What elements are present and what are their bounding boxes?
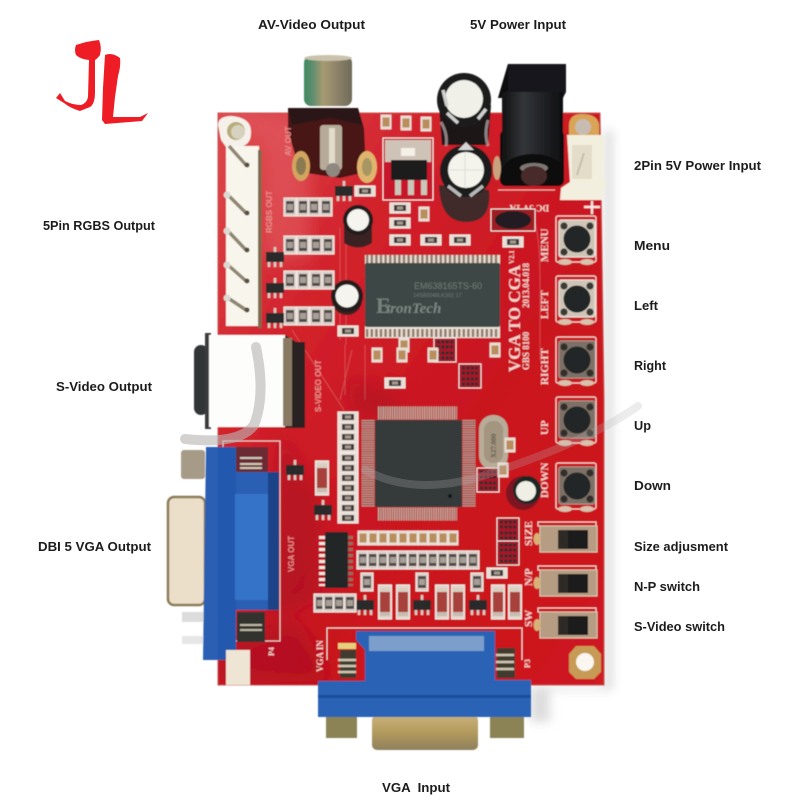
switch: N-P [534,566,597,596]
label: Left: Left [634,299,659,313]
resistor networks right of QFP [477,438,519,565]
resistor rows below QFP [357,531,479,569]
diodes and transistors row [314,568,522,619]
board shadow [530,130,613,722]
silk labels: AV OUT [284,126,293,156]
memory chip: EM638165TS-60 [414,281,482,291]
silk labels: V2.1 [508,250,516,264]
silk: plus sign [584,201,600,214]
label: N-P switch: N-P switch [634,580,700,594]
button: Menu [556,216,596,265]
switch: S-Video [534,608,597,638]
memory chip [365,255,500,338]
copper zone shading [218,380,410,685]
watermark: grey JL strokes [185,347,638,485]
silk labels: P4 [267,647,276,656]
connector: S-Video [194,333,305,429]
silk labels: DOWN [539,462,551,498]
connector: 5-pin RGBS white header [224,146,262,328]
silk labels: SW [523,610,535,627]
label: Menu: Menu [634,239,670,253]
regulator [383,138,433,200]
silk labels: VGA OUT [287,536,296,572]
top left pink area [238,114,316,266]
small components: around QFP top [372,338,500,388]
silk labels: N/P [523,568,535,586]
small components: near regulator [381,115,470,245]
button: Left [556,276,596,325]
label: 5Pin RGBS Output: 5Pin RGBS Output [43,219,156,233]
capacitor: near crystal [506,476,541,510]
label: 2Pin 5V Power Input: 2Pin 5V Power Input [634,159,762,173]
silk labels: UP [539,420,551,435]
crystal [479,415,508,470]
silk labels: RIGHT [539,348,551,385]
pad: bottom left gold [226,650,250,685]
silk labels: VGA TO CGA [505,264,524,372]
mounting hole: top left [218,116,251,147]
connector: AV video RCA jack [288,55,377,183]
label: Right: Right [634,359,667,373]
button: Up [556,397,596,446]
connector: 2-pin power header [560,114,606,200]
memory chip: 14S80048LK392 17 [413,293,462,299]
memory chip: tronTech [386,301,441,317]
silk labels: RGBS OUT [265,191,274,233]
silk labels: LEFT [539,290,551,319]
silk labels: P3 [523,659,532,668]
connector: 5V power DC jack [493,64,566,190]
button: Right [556,337,596,386]
memory chip: E [376,293,391,318]
label: VGA Input: VGA Input [382,781,451,795]
connector: VGA input [318,628,531,750]
silk labels: S-VIDEO OUT [314,360,323,412]
small components: left resistor rows [266,181,375,336]
label: AV-Video Output: AV-Video Output [258,18,366,32]
silk labels: MENU [539,228,551,262]
silk labels: GBS 8100 [521,331,531,370]
label: S-Video switch: S-Video switch [634,620,725,634]
switch: size [534,522,597,552]
small SOP chip [322,532,350,588]
silk labels [265,126,551,672]
silk: DC 5V 1A: DC 5V 1A [509,203,549,213]
scaler QFP chip [368,413,469,514]
routing traces [292,210,540,410]
capacitor: small left upper [343,205,373,248]
label: DBI 5 VGA Output: DBI 5 VGA Output [38,540,152,554]
capacitor: small left lower [331,280,363,315]
crystal: X27.000 [490,433,498,458]
mounting hole: bottom right [569,646,601,679]
circuit board [168,55,606,750]
capacitors [437,73,492,222]
small resistor: below jumper [503,237,523,247]
connector: DBI 5 VGA output [168,441,280,660]
label: Down: Down [634,479,671,493]
silk labels: 2013.04.018 [521,262,531,308]
label: Up: Up [634,419,651,433]
label: S-Video Output: S-Video Output [56,380,153,394]
silk labels: SIZE [523,521,535,546]
button: Down [556,463,596,512]
silk labels: VGA IN [315,640,325,672]
small components: column left of QFP [286,412,358,523]
component: inductor near jack [491,209,535,231]
logo: JL [56,40,148,124]
label: 5V Power Input: 5V Power Input [470,18,567,32]
label: Size adjusment: Size adjusment [634,540,729,554]
